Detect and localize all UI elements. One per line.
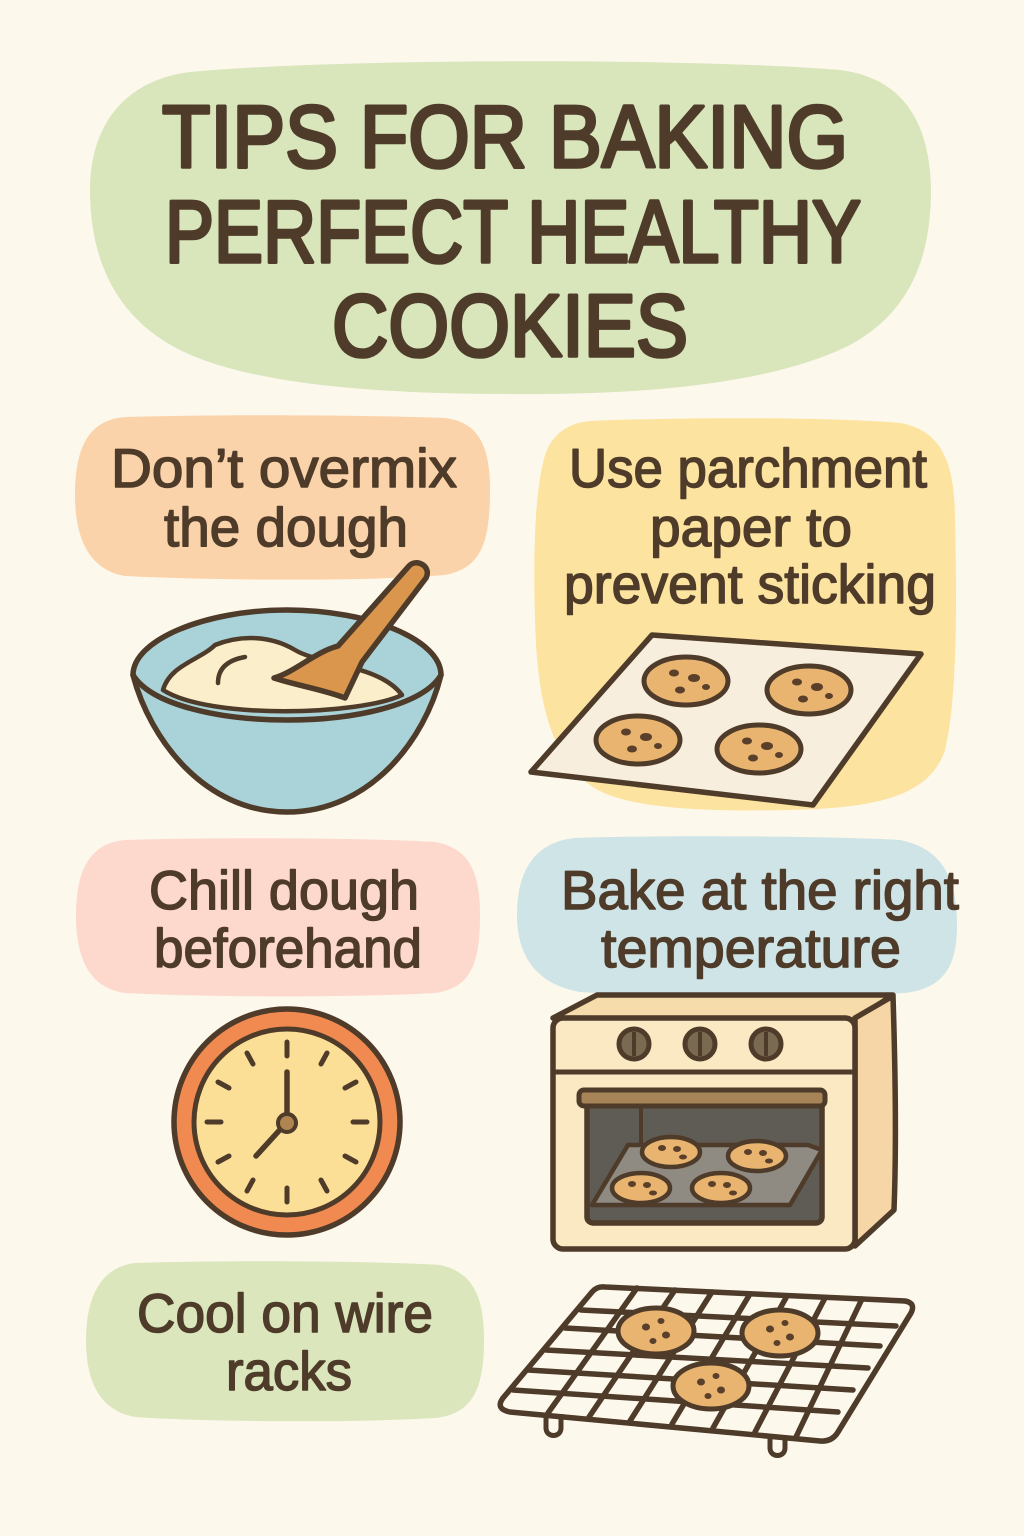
label text: Chill dough (149, 859, 419, 921)
label text (149, 859, 422, 979)
label text (137, 1282, 433, 1402)
rack cookies (618, 1308, 694, 1354)
panel: parchment paper (531, 418, 956, 810)
label background (517, 836, 957, 996)
panel: don't overmix (75, 415, 490, 812)
label text: the dough (164, 496, 408, 558)
label text: prevent sticking (564, 553, 936, 615)
title panel (90, 61, 931, 394)
rack grid (500, 1287, 913, 1441)
label text: Bake at the right (561, 859, 959, 921)
spoon (274, 563, 427, 698)
label text: paper to (650, 496, 852, 558)
title text: PERFECT HEALTHY (165, 182, 861, 281)
title text: COOKIES (332, 276, 688, 375)
label text: Don’t overmix (111, 437, 457, 499)
label text: Cool on wire (137, 1282, 433, 1344)
title text: TIPS FOR BAKING (162, 87, 848, 186)
panel: bake temperature (517, 836, 959, 1249)
oven knobs (619, 1029, 781, 1059)
label text (111, 437, 457, 558)
oven tray (592, 1145, 822, 1205)
label text: Use parchment (569, 437, 927, 499)
label background (534, 418, 956, 810)
panel: cool on wire racks (86, 1261, 913, 1456)
oven window (587, 1092, 822, 1223)
label background (86, 1261, 484, 1421)
icon: mixing bowl (133, 563, 441, 812)
label text (564, 437, 936, 615)
icon: oven (553, 995, 895, 1249)
icon: baking sheet with cookies (531, 635, 921, 805)
title text (162, 87, 861, 375)
clock ticks (207, 1042, 367, 1202)
label background (76, 838, 480, 996)
panel: chill dough (76, 838, 480, 1235)
icon: cooling rack with cookies (500, 1287, 913, 1456)
label text: racks (226, 1340, 352, 1402)
label text: temperature (601, 917, 901, 979)
label text (561, 859, 959, 979)
label text: beforehand (154, 917, 422, 979)
title background (90, 61, 931, 394)
rack feet (546, 1414, 785, 1456)
icon: clock (174, 1009, 400, 1235)
label background (75, 415, 490, 580)
